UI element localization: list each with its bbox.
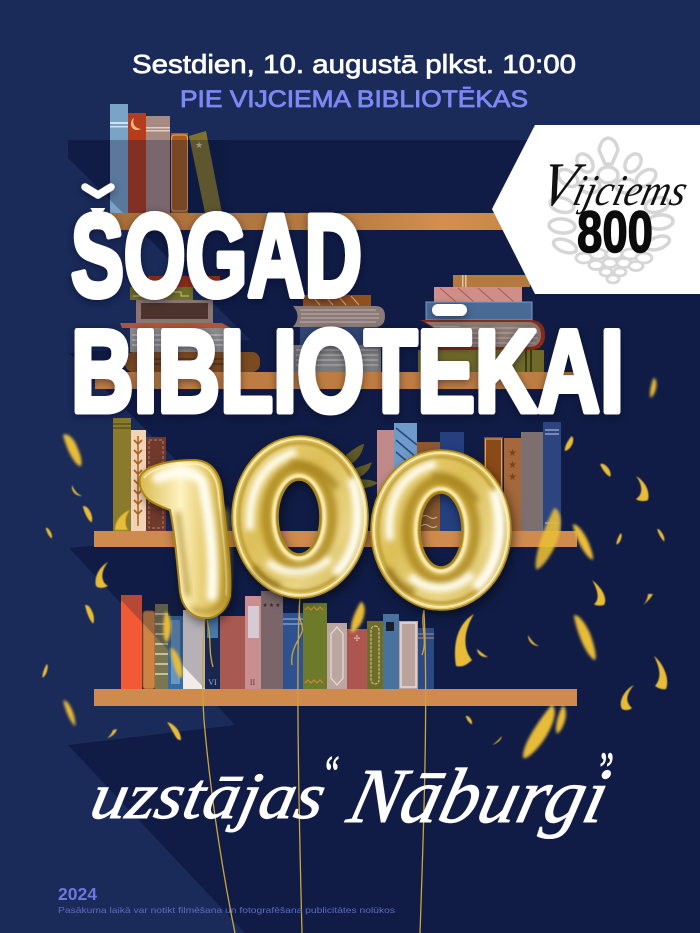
balloon second 0 (371, 450, 511, 610)
books (121, 591, 434, 689)
event date: Sestdien, 10. augustā plkst. 10:00 (132, 49, 576, 79)
main title (71, 187, 624, 436)
books right: ★ (508, 472, 517, 483)
book: olive leaning: ★ (195, 141, 203, 151)
books right: ★ (508, 460, 517, 471)
confetti (41, 378, 667, 762)
opening quote: “ (322, 745, 340, 801)
shelf 3 board (94, 531, 577, 547)
book: light blue (110, 104, 128, 214)
shelf 1 with books (95, 104, 505, 230)
shadow over bottom books (121, 595, 205, 689)
shelf 3 with books (94, 418, 577, 547)
script word Nāburgi: Nāburgi (340, 753, 618, 840)
macron of title (432, 304, 467, 316)
shadow over top books (110, 140, 225, 214)
book: olive leaning (189, 131, 222, 213)
icon: pine cone (548, 138, 674, 283)
shelf 2 board (95, 372, 577, 389)
books right (377, 422, 561, 531)
background shadow of bookshelf (68, 140, 700, 933)
closing quote: ” (596, 741, 614, 797)
shelf 4 with books (94, 591, 577, 706)
string of first 0 (292, 597, 302, 933)
books: VI (208, 678, 217, 687)
logo number: 800 (577, 200, 653, 265)
balloon strings (203, 597, 426, 933)
confetti: dashes (82, 505, 94, 523)
book: red with moon (128, 113, 146, 214)
balloon first 0 (232, 436, 368, 598)
string of second 0 (420, 610, 426, 933)
books: II (250, 678, 256, 687)
books left (113, 418, 166, 531)
shelf 2 with stacked books (95, 275, 577, 389)
caron of title (85, 187, 111, 195)
script word uzstājas: uzstājas (85, 761, 332, 833)
shelf 4 board (94, 689, 577, 706)
books: ✢ (354, 634, 361, 643)
confetti: blurred long pieces (62, 378, 658, 762)
plant leaves (346, 444, 378, 488)
footer year: 2024 (58, 884, 97, 904)
title line 1: ŠOGAD (71, 190, 362, 321)
confetti: crescents (72, 485, 82, 496)
string of digit 1 (203, 618, 235, 933)
logo badge Vijciems 800 (492, 125, 700, 294)
event location: PIE VIJCIEMA BIBLIOTĒKAS (180, 86, 528, 113)
script line performers (85, 741, 618, 840)
books: ★★★ (262, 602, 282, 609)
stack right (418, 275, 545, 372)
stack centre (293, 295, 385, 372)
gold balloons 100 (140, 436, 511, 618)
stack left (120, 276, 260, 372)
books right: ★ (508, 448, 517, 459)
shelf 1 board (95, 213, 505, 230)
footer note: Pasākuma laikā var notikt filmēšana un fotografēšana publicitātes nolūkos (58, 905, 395, 915)
book: taupe (146, 116, 170, 214)
balloon digit 1 (140, 460, 230, 618)
book: orange (171, 133, 188, 214)
